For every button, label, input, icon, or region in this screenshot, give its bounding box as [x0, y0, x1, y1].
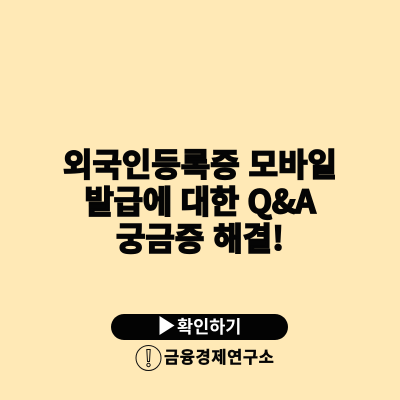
title — [63, 140, 337, 260]
title: 궁금증 해결! — [116, 214, 284, 260]
icon: play triangle — [160, 316, 174, 335]
button label: 확인하기 — [177, 314, 241, 339]
icon: exclamation circle — [136, 345, 162, 371]
title: 외국인등록증 모바일 — [63, 140, 337, 186]
button: 확인하기 — [111, 314, 288, 340]
brand name: 금융경제연구소 — [164, 344, 274, 368]
logo: 금융경제연구소 — [136, 344, 274, 371]
title: 발급에 대한 Q&A — [85, 177, 315, 223]
